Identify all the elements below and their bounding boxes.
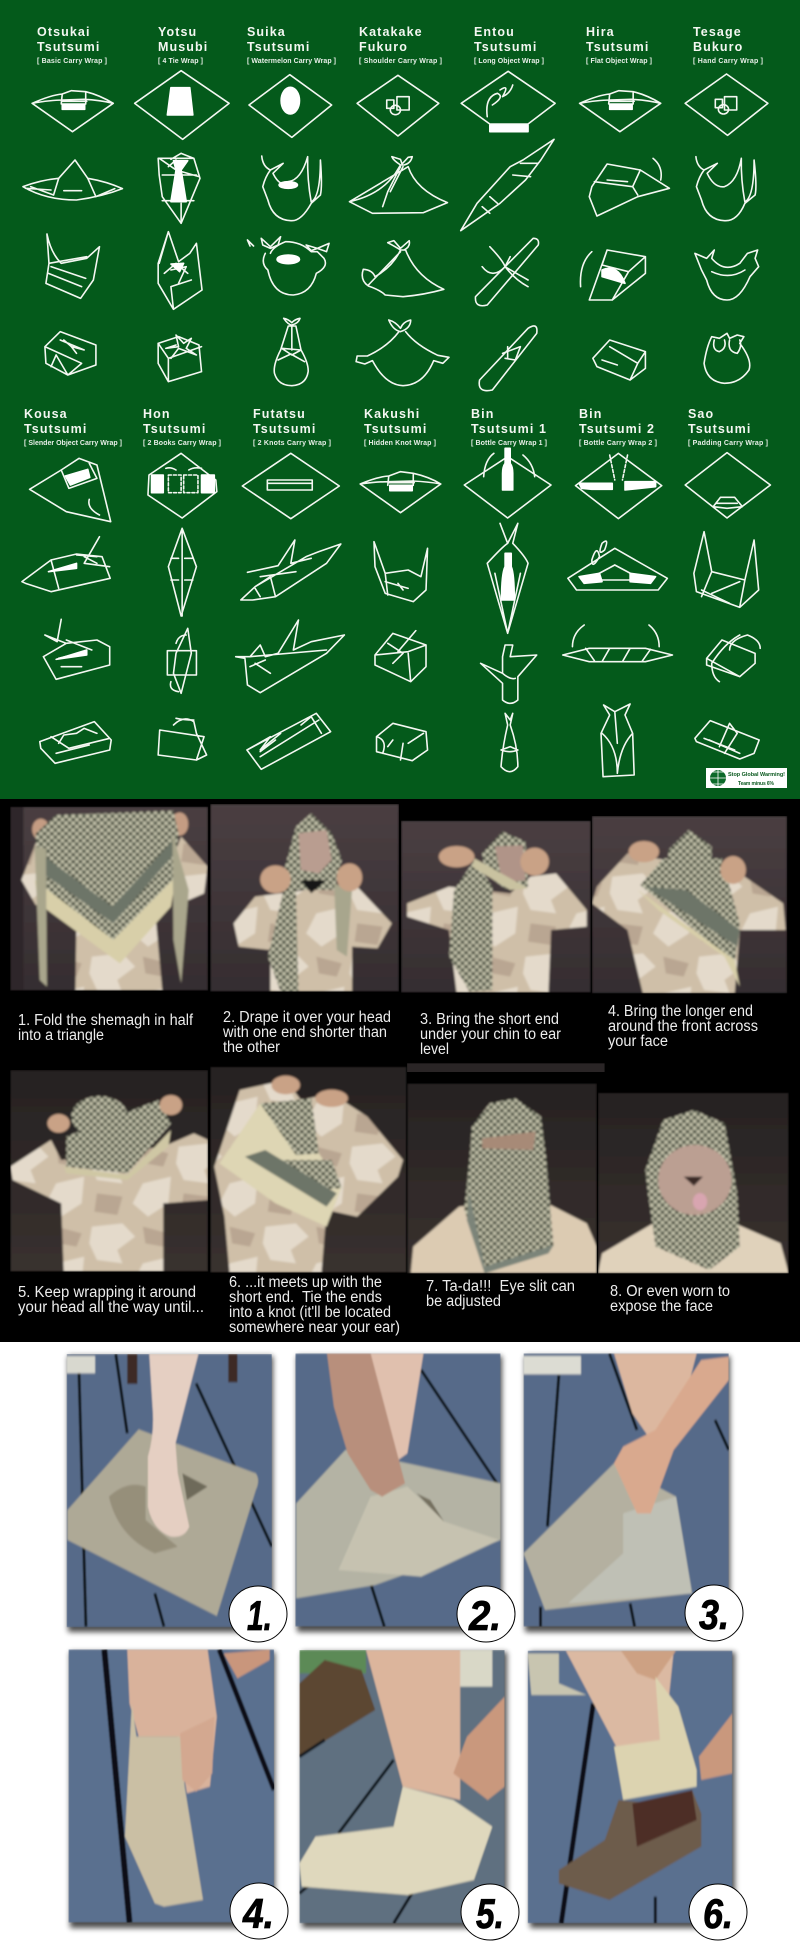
caption: step 2: with one end shorter than [222, 1024, 387, 1041]
heading: Futatsu Tsutsumi: [ 2 Knots Carry Wrap ] [253, 440, 331, 447]
panel: furoshiki wrapping chart [0, 0, 800, 799]
diagram: Yotsu step 2 [158, 153, 200, 223]
panel: foot wrap tutorial [0, 1342, 800, 1952]
heading: Katakake Fukuro: [ Shoulder Carry Wrap ] [359, 58, 442, 65]
column: Suika Tsutsumi [247, 25, 336, 386]
diagram: Otsukai step 4 [45, 332, 96, 375]
diagram: Hira step 3 [580, 250, 645, 300]
column: Katakake Fukuro [349, 25, 449, 386]
diagram: Hon step 3 [167, 628, 196, 693]
heading: Suika Tsutsumi: Tsutsumi [247, 40, 310, 54]
diagram: Kousa step 3 [43, 619, 110, 679]
column: Hon Tsutsumi [143, 407, 221, 760]
diagram: Hira step 1 [580, 91, 661, 132]
diagram: Hon step 4 [158, 718, 207, 760]
diagram: Hira step 2 [589, 158, 669, 216]
caption: step 1: into a triangle [18, 1027, 104, 1044]
photo: foot step 3 [524, 1353, 729, 1627]
heading: Hira Tsutsumi: Hira [586, 25, 615, 39]
diagram: Kakushi step 4 [377, 723, 428, 761]
diagram: Katakake step 2 [349, 157, 447, 213]
diagram: Yotsu step 4 [158, 335, 202, 382]
diagram: Bin 1 step 3 [481, 645, 537, 703]
heading: Suika Tsutsumi [247, 25, 336, 65]
number badge: 1 [229, 1586, 287, 1642]
heading: Suika Tsutsumi: Suika [247, 25, 286, 39]
heading: Kakushi Tsutsumi: Tsutsumi [364, 422, 427, 436]
caption: step 4: 4. Bring the longer end [608, 1003, 753, 1020]
caption: step 6: somewhere near your ear) [229, 1319, 400, 1336]
logo: Stop Global Warming [706, 768, 787, 788]
caption: step 5: your head all the way until... [18, 1299, 204, 1316]
heading: Entou Tsutsumi: Tsutsumi [474, 40, 537, 54]
diagram: Katakake step 3 [362, 241, 444, 297]
column: Sao Tsutsumi [685, 407, 770, 759]
diagram: Entou step 1 [461, 71, 555, 132]
diagram: Suika step 4 [274, 318, 308, 386]
number badge: 3: 3. [699, 1591, 729, 1638]
logo: Stop Global Warming: Team minus 6% [738, 781, 775, 787]
heading: Otsukai Tsutsumi: [ Basic Carry Wrap ] [37, 58, 107, 65]
heading: Futatsu Tsutsumi [253, 407, 331, 447]
heading: Hira Tsutsumi: [ Flat Object Wrap ] [586, 58, 652, 65]
heading: Kakushi Tsutsumi [364, 407, 436, 447]
diagram: Sao step 4 [695, 721, 759, 759]
caption: step 7: be adjusted [426, 1293, 501, 1310]
heading: Katakake Fukuro: Fukuro [359, 40, 408, 54]
number badge: 2: 2. [468, 1592, 501, 1639]
heading: Hon Tsutsumi: Tsutsumi [143, 422, 206, 436]
heading: Entou Tsutsumi: [ Long Object Wrap ] [474, 58, 544, 65]
heading: Bin Tsutsumi 2 [579, 407, 657, 447]
diagram: Futatsu step 3 [236, 620, 344, 693]
diagram: Hon step 1 [148, 453, 217, 518]
heading: Futatsu Tsutsumi: Tsutsumi [253, 422, 316, 436]
diagram: Yotsu step 1 [135, 71, 229, 139]
diagram: Sao step 1 [685, 453, 770, 518]
caption: step 8: expose the face [610, 1298, 713, 1315]
photo: step 5 keep wrapping [10, 1070, 208, 1272]
panel: shemagh tutorial [0, 799, 800, 1342]
heading: Katakake Fukuro: Katakake [359, 25, 423, 39]
diagram: Futatsu step 2 [241, 540, 341, 600]
photo: step 6 tie the knot [210, 1067, 407, 1273]
column: Kousa Tsutsumi [22, 407, 122, 763]
heading: Yotsu Musubi: [ 4 Tie Wrap ] [158, 58, 203, 65]
photo: step 2 drape over head [210, 804, 399, 992]
photo: foot step 2 [295, 1353, 501, 1627]
heading: Tesage Bukuro: Tesage [693, 25, 742, 39]
heading: Bin Tsutsumi 1 [471, 407, 547, 447]
diagram: Kakushi step 1 [360, 472, 441, 513]
diagram: Kousa step 2 [22, 537, 110, 592]
heading: Bin Tsutsumi 1: Bin [471, 407, 494, 421]
heading: Sao Tsutsumi: Sao [688, 407, 714, 421]
heading: Otsukai Tsutsumi [37, 25, 107, 65]
heading: Kousa Tsutsumi: Kousa [24, 407, 68, 421]
diagram: Kakushi step 3 [375, 631, 426, 682]
number badge: 5: 5. [476, 1890, 504, 1937]
diagram: Otsukai step 2 [23, 160, 122, 200]
diagram: Kakushi step 2 [374, 542, 428, 602]
number badge: 2 [457, 1586, 515, 1642]
diagram: Bin 2 step 3 [563, 625, 672, 662]
column: Futatsu Tsutsumi [236, 407, 344, 769]
diagram: Entou step 2 [461, 139, 554, 231]
caption: step 6: 6. ...it meets up with the [229, 1274, 382, 1291]
number badge: 4: 4. [242, 1890, 274, 1937]
photo: foot step 5 [299, 1650, 505, 1923]
caption: step 8: 8. Or even worn to [610, 1283, 730, 1300]
number badge: 1: 1. [247, 1592, 272, 1639]
caption: step 3: level [420, 1041, 449, 1058]
diagram: Tesage step 1 [685, 74, 768, 135]
diagram: Futatsu step 1 [242, 453, 339, 519]
diagram: Bin 1 step 4 [501, 713, 518, 772]
heading: Yotsu Musubi: Yotsu [158, 25, 197, 39]
heading: Tesage Bukuro [693, 25, 763, 65]
number badge: 5 [461, 1884, 519, 1940]
photo: foot step 1 [67, 1354, 272, 1627]
heading: Hon Tsutsumi [143, 407, 221, 447]
heading: Sao Tsutsumi [688, 407, 768, 447]
caption: step 3: 3. Bring the short end [420, 1011, 559, 1028]
diagram: Sao step 3 [707, 635, 760, 682]
heading: Otsukai Tsutsumi: Tsutsumi [37, 40, 100, 54]
photo: foot step 6 [528, 1651, 732, 1923]
caption: step 6: short end. Tie the ends [229, 1289, 382, 1306]
column: Entou Tsutsumi [461, 25, 555, 391]
heading: Hon Tsutsumi: Hon [143, 407, 171, 421]
caption: step 6: into a knot (it'll be located [229, 1304, 391, 1321]
logo: Stop Global Warming: Stop Global Warming! [728, 772, 785, 778]
diagram: Otsukai step 1 [32, 91, 113, 132]
heading: Entou Tsutsumi: Entou [474, 25, 515, 39]
heading: Bin Tsutsumi 2: Bin [579, 407, 602, 421]
diagram: Suika step 2 [262, 156, 321, 221]
diagram: Otsukai step 3 [46, 234, 99, 298]
column: Kakushi Tsutsumi [360, 407, 441, 761]
heading: Bin Tsutsumi 1: [ Bottle Carry Wrap 1 ] [471, 440, 547, 447]
diagram: Suika step 3 [247, 237, 329, 295]
photo: step 8 exposed face [598, 1093, 789, 1273]
heading: Kakushi Tsutsumi: [ Hidden Knot Wrap ] [364, 440, 436, 447]
diagram: Bin 2 step 1 [576, 453, 662, 519]
heading: Kousa Tsutsumi [24, 407, 122, 447]
diagram: Hira step 4 [593, 340, 645, 380]
heading: Bin Tsutsumi 2: [ Bottle Carry Wrap 2 ] [579, 440, 657, 447]
caption: step 7: 7. Ta-da!!! Eye slit can [426, 1278, 575, 1295]
photo: step 7 eye slit [407, 1063, 605, 1273]
heading: Hon Tsutsumi: [ 2 Books Carry Wrap ] [143, 440, 221, 447]
diagram: Kousa step 1 [30, 458, 111, 522]
heading: Tesage Bukuro: Bukuro [693, 40, 743, 54]
diagram: Bin 2 step 2 [568, 541, 667, 590]
heading: Entou Tsutsumi [474, 25, 544, 65]
photo: step 4 longer end across face [592, 816, 787, 993]
heading: Suika Tsutsumi: [ Watermelon Carry Wrap ] [247, 58, 336, 65]
heading: Sao Tsutsumi: [ Padding Carry Wrap ] [688, 440, 768, 447]
caption: step 3: under your chin to ear [420, 1026, 561, 1043]
column: Hira Tsutsumi [580, 25, 669, 380]
diagram: Tesage step 2 [696, 157, 756, 221]
heading: Hira Tsutsumi: Tsutsumi [586, 40, 649, 54]
heading: Katakake Fukuro [359, 25, 442, 65]
diagram: Bin 1 step 2 [487, 523, 528, 633]
diagram: Tesage step 4 [704, 333, 750, 383]
diagram: Futatsu step 4 [247, 713, 331, 769]
column: Bin Tsutsumi 1 [464, 407, 551, 772]
column: Bin Tsutsumi 2 [563, 407, 672, 777]
heading: Futatsu Tsutsumi: Futatsu [253, 407, 306, 421]
number badge: 4 [230, 1883, 288, 1939]
diagram: Suika step 1 [249, 75, 332, 137]
heading: Tesage Bukuro: [ Hand Carry Wrap ] [693, 58, 763, 65]
heading: Kakushi Tsutsumi: Kakushi [364, 407, 420, 421]
diagram: Entou step 3 [475, 238, 539, 306]
caption: step 1: 1. Fold the shemagh in half [18, 1012, 194, 1029]
diagram: Katakake step 1 [357, 75, 439, 136]
diagram: Sao step 2 [694, 532, 759, 607]
heading: Yotsu Musubi: Musubi [158, 40, 208, 54]
caption: step 2: the other [223, 1039, 280, 1056]
column: Tesage Bukuro [685, 25, 768, 383]
heading: Sao Tsutsumi: Tsutsumi [688, 422, 751, 436]
heading: Hira Tsutsumi [586, 25, 652, 65]
number badge: 3 [685, 1585, 743, 1641]
diagram: Katakake step 4 [356, 320, 449, 386]
number badge: 6: 6. [703, 1890, 733, 1937]
diagram: Hon step 2 [168, 528, 196, 616]
diagram: Bin 2 step 4 [601, 704, 634, 777]
diagram: Yotsu step 3 [158, 232, 202, 309]
number badge: 6 [689, 1884, 747, 1940]
column: Yotsu Musubi [135, 25, 229, 382]
caption: step 5: 5. Keep wrapping it around [18, 1284, 196, 1301]
diagram: Bin 1 step 1 [464, 448, 551, 518]
diagram: Kousa step 4 [40, 722, 111, 763]
photo: step 1 fold shemagh [10, 807, 208, 991]
diagram: Tesage step 3 [695, 250, 759, 300]
column: Otsukai Tsutsumi [23, 25, 122, 375]
heading: Kousa Tsutsumi: Tsutsumi [24, 422, 87, 436]
caption: step 2: 2. Drape it over your head [223, 1009, 391, 1026]
photo: foot step 4 [68, 1649, 274, 1923]
caption: step 4: your face [608, 1033, 668, 1050]
photo: step 3 short end under chin [401, 821, 591, 993]
diagram: Entou step 4 [479, 326, 537, 391]
heading: Yotsu Musubi [158, 25, 208, 65]
heading: Bin Tsutsumi 1: Tsutsumi 1 [471, 422, 547, 436]
heading: Otsukai Tsutsumi: Otsukai [37, 25, 91, 39]
caption: step 4: around the front across [608, 1018, 758, 1035]
heading: Bin Tsutsumi 2: Tsutsumi 2 [579, 422, 655, 436]
photo frame shadows [68, 1356, 735, 1928]
heading: Kousa Tsutsumi: [ Slender Object Carry Wrap ] [24, 440, 122, 447]
